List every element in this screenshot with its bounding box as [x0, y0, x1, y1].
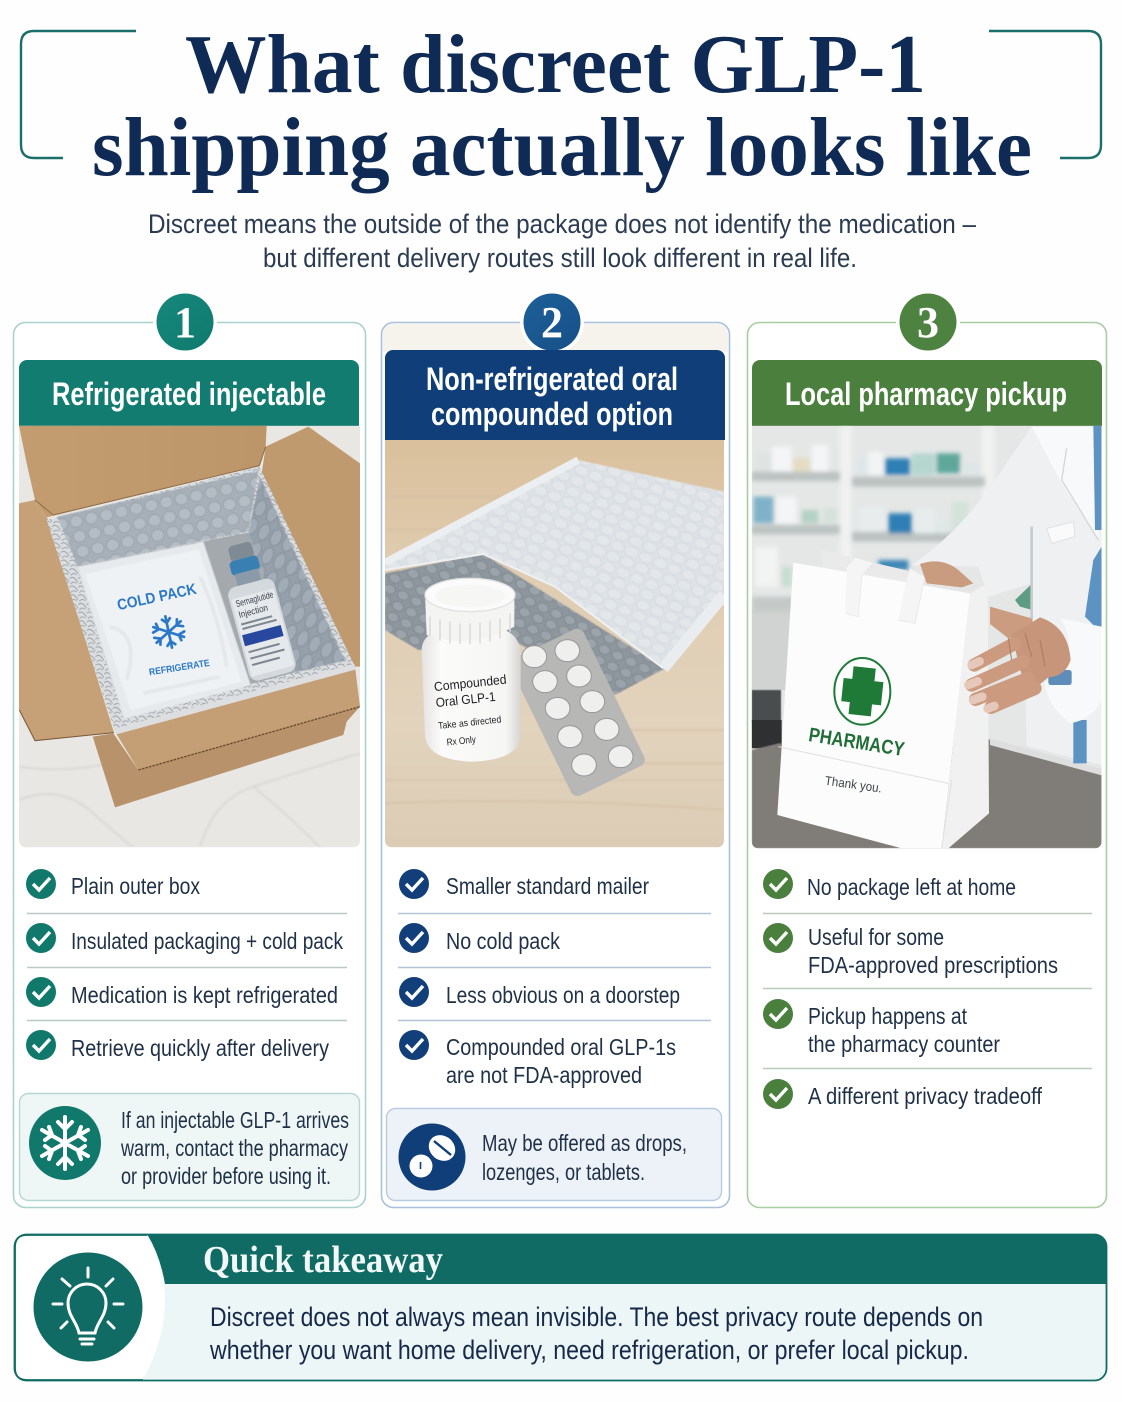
number badge 1: 1	[174, 298, 196, 347]
counter	[752, 737, 1102, 848]
header 3	[752, 360, 1102, 426]
icon: tablets	[398, 1124, 466, 1190]
pharmacy logo	[834, 658, 890, 725]
item: privacy tradeoff: A different privacy tradeoff	[808, 1083, 1043, 1109]
callout text: warm, contact the pharmacy	[120, 1135, 348, 1161]
callout text	[482, 1130, 687, 1185]
callout text: If an injectable GLP-1 arrives	[121, 1107, 349, 1133]
takeaway text: whether you want home delivery, need refrigeration, or prefer local pickup.	[209, 1335, 969, 1365]
icon: snowflake	[29, 1106, 101, 1180]
takeaway heading: Quick takeaway	[203, 1239, 443, 1281]
item: kept refrigerated	[26, 977, 338, 1008]
checklist 3	[763, 869, 1092, 1109]
vial: Injection	[237, 603, 269, 620]
callout text	[120, 1107, 349, 1189]
subtitle: but different delivery routes still look different in real life.	[263, 243, 857, 273]
takeaway background	[14, 1234, 1106, 1380]
item: pharmacy counter: the pharmacy counter	[808, 1031, 1000, 1057]
takeaway text: Discreet does not always mean invisible. The best privacy route depends on	[210, 1302, 983, 1332]
item: no package: No package left at home	[807, 874, 1016, 900]
number badge 1	[153, 290, 217, 354]
item: less obvious	[399, 977, 680, 1008]
item: not FDA-approved: are not FDA-approved	[446, 1062, 642, 1088]
item: insulated packaging: Insulated packaging + cold pack	[71, 928, 343, 954]
panel: refrigerated injectable	[14, 290, 366, 1208]
number badge 3	[896, 290, 960, 354]
title: What discreet GLP-1	[185, 18, 926, 111]
vial	[228, 542, 296, 681]
snowflake on cold pack	[152, 615, 186, 649]
item: smaller mailer: Smaller standard mailer	[446, 873, 649, 899]
number badge 3: 3	[917, 298, 939, 347]
panel: non-refrigerated oral compounded option	[382, 290, 730, 1208]
item: kept refrigerated: Medication is kept refrigerated	[71, 982, 338, 1008]
icon: light bulb	[34, 1252, 142, 1362]
title: shipping actually looks like	[92, 101, 1032, 194]
header 1: Refrigerated injectable	[52, 376, 326, 412]
pill bottle	[422, 578, 521, 762]
item: not FDA-approved	[399, 1030, 676, 1088]
paper bag	[874, 563, 908, 574]
checklist 1	[26, 869, 347, 1061]
header 1	[19, 360, 359, 426]
cold pack label: COLD PACK	[116, 581, 198, 614]
thank you label: Thank you.	[824, 774, 883, 796]
vial: Semaglutide	[234, 589, 274, 609]
callout: oral forms	[386, 1108, 722, 1200]
panel: quick takeaway	[14, 1234, 1107, 1380]
callout: arrives warm	[20, 1094, 360, 1200]
callout text: or provider before using it.	[121, 1163, 331, 1189]
takeaway text	[209, 1302, 983, 1365]
number badge 2	[520, 290, 584, 354]
callout text: lozenges, or tablets.	[482, 1159, 645, 1185]
title frame	[21, 31, 1101, 158]
lower hand on the bag	[968, 607, 1071, 709]
takeaway header band	[147, 1234, 1107, 1284]
item: no cold pack: No cold pack	[446, 928, 560, 954]
item: plain outer box: Plain outer box	[71, 873, 200, 899]
pill bottle: Compounded	[433, 672, 507, 694]
lab coat	[912, 427, 1102, 765]
item: smaller mailer	[399, 869, 649, 899]
subtitle: Discreet means the outside of the package does not identify the medication –	[148, 209, 976, 239]
item: pharmacy counter	[763, 999, 1000, 1057]
item: no cold pack	[399, 923, 560, 954]
item: insulated packaging	[26, 923, 343, 954]
photo: bubble mailer, pill bottle, blister pack	[385, 440, 724, 847]
item: less obvious: Less obvious on a doorstep	[446, 982, 680, 1008]
header 2: Non-refrigerated oral	[426, 361, 678, 397]
pharmacy label: PHARMACY	[807, 724, 906, 761]
item: privacy tradeoff	[763, 1079, 1043, 1109]
item: retrieve quickly	[26, 1030, 329, 1061]
title	[92, 18, 1032, 194]
pill bottle: Rx Only	[446, 734, 477, 749]
item: plain outer box	[26, 869, 200, 899]
blurred pharmacy shelves	[752, 426, 995, 612]
refrigerate label: REFRIGERATE	[148, 658, 211, 678]
item: pharmacy counter: Pickup happens at	[808, 1003, 968, 1029]
cuff and sleeve	[1045, 618, 1102, 723]
blister pack	[520, 628, 645, 796]
photo: pharmacist handing over a paper bag	[752, 426, 1102, 848]
upper hand on the bag	[920, 561, 973, 587]
item: no package	[763, 869, 1016, 900]
photo: open cardboard box with cold pack and vial	[19, 426, 360, 847]
left white icon area	[15, 1235, 165, 1380]
callout text: May be offered as drops,	[482, 1130, 687, 1156]
item: useful for some: FDA-approved prescriptions	[808, 952, 1058, 978]
panel 1 outline	[14, 322, 366, 1208]
panel: local pharmacy pickup	[748, 290, 1106, 1208]
pill bottle: Take as directed	[438, 714, 502, 732]
subtitle	[148, 209, 976, 273]
panel 2 outline	[382, 322, 730, 1208]
item: not FDA-approved: Compounded oral GLP-1s	[446, 1034, 676, 1060]
item: useful for some: Useful for some	[808, 924, 944, 950]
pill bottle: Oral GLP-1	[435, 689, 496, 710]
item: useful for some	[763, 923, 1058, 978]
header 2	[385, 350, 725, 440]
panel 3 outline	[748, 322, 1106, 1208]
number badge 2: 2	[541, 298, 563, 347]
checklist 2	[398, 869, 711, 1088]
item: retrieve quickly: Retrieve quickly after delivery	[71, 1035, 329, 1061]
header 2: compounded option	[431, 396, 673, 432]
